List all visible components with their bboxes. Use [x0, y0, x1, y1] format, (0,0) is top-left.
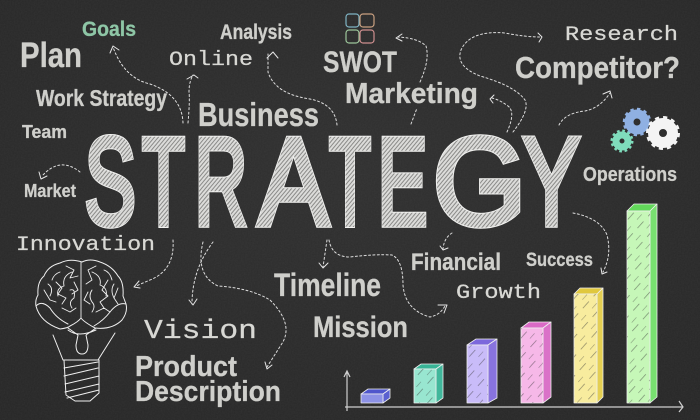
arrow: to Success [573, 213, 609, 274]
title: STRATEGY: Y [523, 114, 580, 252]
axes [344, 371, 683, 412]
label: Research: Research [565, 24, 678, 47]
arrow: to Analysis [267, 52, 337, 125]
screw base [64, 360, 99, 401]
label: SWOT: SWOT [323, 46, 397, 79]
label: Plan: Plan [20, 36, 82, 75]
bar: blue [361, 389, 390, 403]
label: Innovation: Innovation [16, 234, 155, 257]
bar chart [344, 204, 683, 412]
title: STRATEGY: S [84, 114, 136, 252]
icon: SWOT squares [346, 14, 374, 43]
label: Success: Success [526, 250, 593, 271]
title: STRATEGY: R [194, 114, 248, 252]
bulb filament [68, 328, 96, 354]
arrow: to Marketing [490, 95, 512, 132]
bulb neck [53, 333, 115, 360]
arrow: to SWOT [396, 34, 427, 124]
title: STRATEGY: T [329, 114, 371, 252]
label: Product Description: Product [135, 351, 237, 383]
arrow: to Product [201, 242, 286, 369]
title: STRATEGY: S [84, 114, 136, 252]
icon: brain light bulb [36, 260, 126, 401]
label: Timeline: Timeline [274, 267, 381, 303]
arrow: to Research [460, 33, 542, 132]
title: STRATEGY: T [142, 114, 185, 252]
title: STRATEGY [84, 114, 580, 252]
label: Growth: Growth [456, 282, 541, 305]
title: STRATEGY: R [194, 114, 248, 252]
label: Goals: Goals [82, 18, 136, 41]
arrow: to Timeline [319, 240, 328, 268]
title: STRATEGY: T [329, 114, 371, 252]
title: STRATEGY: E [378, 114, 428, 252]
title: STRATEGY: G [433, 114, 526, 252]
brain outline [36, 260, 126, 329]
label: Team: Team [22, 122, 67, 142]
arrow: to Growth [329, 240, 447, 317]
label: Product Description: Description [135, 376, 281, 408]
bar: yellow [574, 288, 603, 403]
arrow: to brain [134, 240, 173, 288]
label: Operations: Operations [583, 164, 677, 186]
title: STRATEGY: A [258, 114, 329, 252]
label: Financial: Financial [411, 249, 501, 276]
title: STRATEGY: E [378, 114, 428, 252]
title: STRATEGY: T [142, 114, 185, 252]
bar: pink [521, 322, 551, 403]
icon: gears [612, 110, 678, 151]
arrow: to Online [187, 75, 198, 123]
title: STRATEGY: A [258, 114, 329, 252]
arrow: to Financial [440, 233, 452, 250]
bar: purple [467, 339, 497, 403]
label: Online: Online [169, 49, 253, 72]
label: Vision: Vision [144, 317, 257, 347]
arrow: to Competitor [559, 91, 612, 125]
arrow: to Market [39, 165, 80, 179]
label: Analysis: Analysis [220, 21, 292, 44]
label: Market: Market [24, 181, 76, 201]
label: Competitor?: Competitor? [515, 50, 680, 85]
label: Marketing: Marketing [345, 78, 478, 110]
label: Business: Business [198, 96, 319, 133]
title: STRATEGY: Y [523, 114, 580, 252]
arrow: to Vision [189, 242, 213, 305]
bar: teal [414, 364, 443, 403]
bar: green [627, 204, 657, 403]
brain folds [44, 262, 118, 318]
title: STRATEGY: G [433, 114, 526, 252]
brain lower lobes [36, 303, 126, 326]
dashed arrows [39, 33, 612, 369]
label: Work Strategy: Work Strategy [36, 85, 167, 111]
arrow: to Goals [110, 46, 183, 123]
label: Mission: Mission [313, 311, 408, 344]
